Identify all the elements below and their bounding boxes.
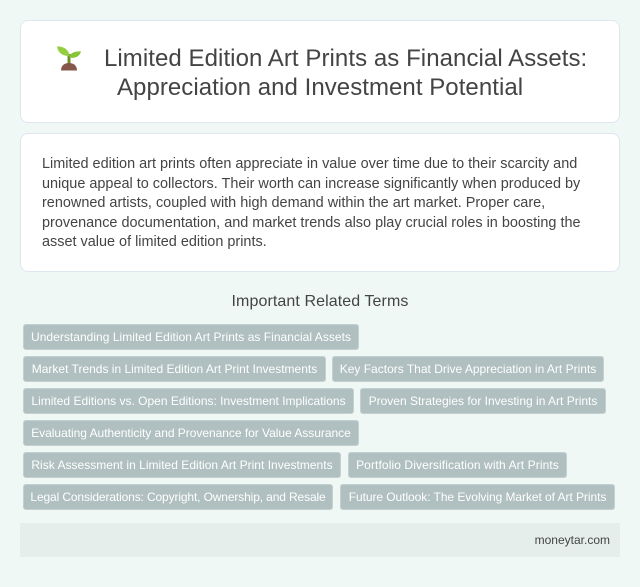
- tag: [23, 452, 341, 478]
- tag: Future Outlook: The Evolving Market of Art Prints: [349, 490, 606, 504]
- tag: Key Factors That Drive Appreciation in Art Prints: [340, 362, 596, 376]
- panel: related term tags: [23, 324, 615, 510]
- panel: description: [20, 133, 620, 272]
- description text: renowned artists, coupled with high demand within the art market. Proper care,: [42, 195, 545, 211]
- tag: Legal Considerations: Copyright, Ownership, and Resale: [30, 490, 326, 504]
- tag: [348, 452, 567, 478]
- tag: [23, 388, 354, 414]
- description text: asset value of limited edition prints.: [42, 234, 267, 250]
- tag: Evaluating Authenticity and Provenance for Value Assurance: [31, 426, 351, 440]
- tag: [23, 324, 359, 350]
- icon: seedling: [57, 46, 81, 70]
- tag: Understanding Limited Edition Art Prints as Financial Assets: [31, 330, 351, 344]
- description text: unique appeal to collectors. Their worth can increase significantly when produced by: [42, 176, 580, 192]
- tag: Portfolio Diversification with Art Prints: [356, 458, 559, 472]
- tag: [23, 356, 326, 382]
- tag: Proven Strategies for Investing in Art Prints: [369, 394, 597, 408]
- tag: Risk Assessment in Limited Edition Art Print Investments: [31, 458, 333, 472]
- description text: [42, 156, 581, 250]
- tag: Limited Editions vs. Open Editions: Investment Implications: [31, 394, 346, 408]
- tag: Market Trends in Limited Edition Art Print Investments: [32, 362, 317, 376]
- title: Appreciation and Investment Potential: [117, 74, 523, 101]
- panel: title card: [20, 20, 620, 123]
- title: Limited Edition Art Prints as Financial Assets:: [104, 45, 587, 72]
- tag: [23, 484, 333, 510]
- footer bar: [20, 523, 620, 557]
- description text: Limited edition art prints often appreciate in value over time due to their scarcity and: [42, 156, 577, 172]
- description text: provenance documentation, and market trends also play crucial roles in boosting the: [42, 215, 581, 231]
- tag: [340, 484, 615, 510]
- tag: [360, 388, 606, 414]
- heading: related terms: Important Related Terms: [232, 293, 408, 310]
- title: [104, 45, 587, 101]
- tag: [332, 356, 604, 382]
- tag: [23, 420, 359, 446]
- footer text: moneytar.com: [535, 533, 610, 547]
